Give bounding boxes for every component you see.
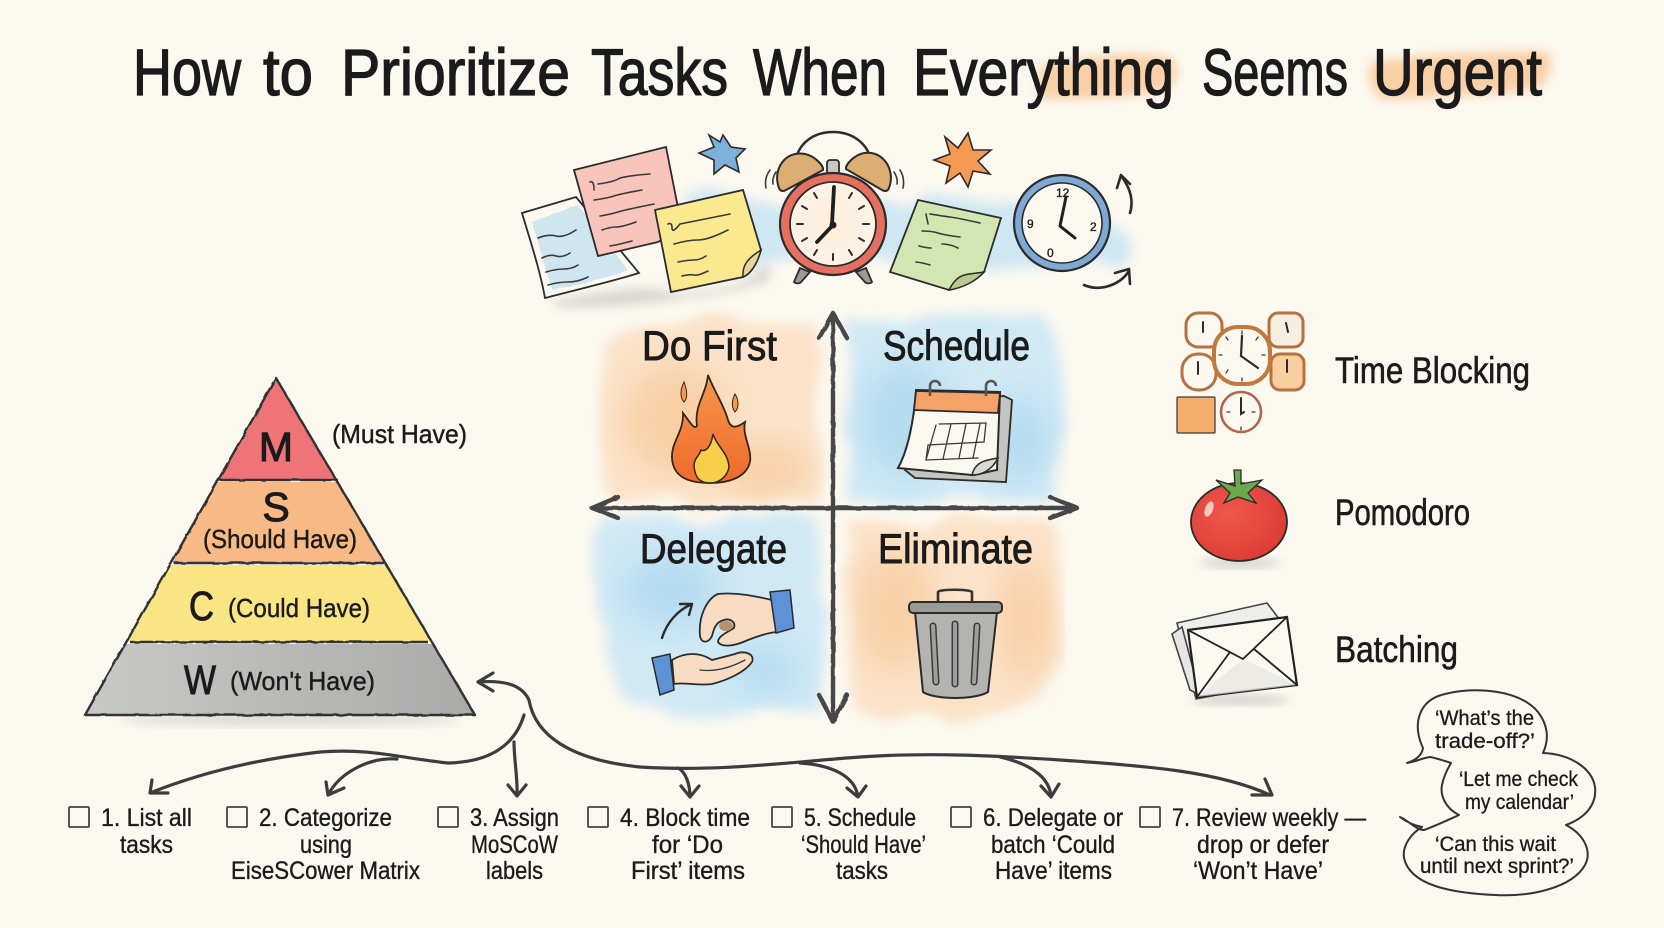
title text (133, 35, 1542, 109)
step 1: 1. List all (101, 804, 192, 832)
top illustration: overwhelm cluster (522, 132, 1132, 307)
step 1 (69, 804, 192, 859)
arrow: to step 3 (508, 742, 526, 796)
icon: blue wall clock: 0 (1047, 246, 1054, 260)
arrow: clockwise lower (1084, 269, 1130, 288)
bubble 3 text (1420, 833, 1574, 878)
bubble outlines (1400, 690, 1595, 895)
pyramid label: C: C (189, 583, 214, 629)
step 6: 6. Delegate or (983, 804, 1123, 832)
step 2: using (300, 831, 352, 859)
pyramid label: M: M (259, 424, 293, 470)
pyramid label: Won't Have: (Won't Have) (230, 666, 375, 696)
icon: blue star (699, 135, 745, 174)
icon: blue wall clock: 9 (1027, 217, 1034, 231)
speech bubbles (1400, 690, 1595, 895)
panel: techniques (1172, 313, 1530, 704)
arrow: to step 4 (678, 768, 699, 797)
quadrant heading: Eliminate: Eliminate (878, 525, 1033, 572)
step 6: Have’ items (995, 857, 1112, 885)
step 7: drop or defer (1197, 831, 1329, 859)
arrow: to step 2 (326, 759, 397, 795)
title highlight: Urgent (1369, 51, 1551, 100)
step 2 (227, 804, 420, 885)
arrow: to pyramid and steps 4 to 7 (478, 673, 1270, 795)
arrow: clockwise upper (1117, 175, 1132, 213)
note: green sticky (890, 200, 1001, 290)
bubble 3 text: ‘Can this wait (1435, 833, 1556, 856)
paper shadow (552, 262, 770, 307)
matrix axes (592, 313, 1077, 722)
title text: Prioritize (341, 35, 570, 109)
icon: tomato (1191, 470, 1287, 567)
quadrant wash: do first (598, 321, 820, 503)
blue wash behind cluster (680, 190, 1132, 265)
arrow: to step 5 (800, 763, 866, 797)
pyramid shadow (120, 715, 460, 725)
bubble 1 text (1435, 707, 1535, 753)
title text: to (263, 35, 313, 109)
note: blue paper (522, 197, 639, 298)
title text: Urgent (1373, 35, 1542, 109)
pyramid layer: W (86, 644, 474, 714)
step 3: MoSCoW (471, 831, 558, 859)
bubble 3 text: until next sprint?’ (1420, 855, 1574, 878)
flow arrows (150, 673, 1272, 797)
step 5: 5. Schedule (804, 804, 916, 832)
quadrant wash: eliminate (846, 520, 1060, 714)
pyramid label: Should Have: (Should Have) (203, 524, 357, 554)
step 3 (438, 804, 559, 885)
step 4: 4. Block time (620, 804, 750, 832)
icon: blue wall clock: 12 (1056, 186, 1070, 200)
icon: envelope stack (1172, 603, 1297, 704)
title text: Seems (1202, 35, 1348, 109)
icon: red alarm clock (766, 132, 904, 283)
step 4: First’ items (631, 857, 745, 885)
step 4 (588, 804, 750, 885)
title highlight: Everything (1038, 54, 1177, 99)
icon: blue wall clock (1014, 175, 1110, 271)
bubble 1 text: trade-off?’ (1435, 730, 1535, 753)
technique label: Time Blocking: Time Blocking (1335, 350, 1530, 391)
checklist steps (69, 804, 1366, 885)
arrow tip: to step 7 (1252, 779, 1272, 795)
pyramid label: S: S (262, 484, 290, 530)
pyramid layer: M (218, 380, 336, 480)
step 3: 3. Assign (470, 804, 559, 832)
arrow: to step 6 (1000, 757, 1059, 797)
technique label: Batching: Batching (1335, 629, 1458, 670)
bubble 2 text: my calendar’ (1465, 791, 1574, 814)
icon: orange star (934, 133, 991, 187)
pyramid label: W: W (184, 657, 216, 703)
icon: time blocking clocks (1177, 313, 1304, 433)
icon: flame (672, 375, 750, 483)
bubble 2 text (1459, 768, 1578, 814)
quadrant wash: schedule (848, 315, 1063, 502)
step 2: EiseSCower Matrix (231, 857, 420, 885)
quadrant heading: Do First: Do First (642, 322, 777, 369)
quadrant heading: Delegate: Delegate (640, 525, 787, 572)
title text: Tasks (591, 35, 728, 109)
step 7 (1140, 804, 1366, 885)
pyramid label: Must Have: (Must Have) (332, 419, 467, 449)
bubble 1 text: ‘What’s the (1435, 707, 1534, 730)
pyramid label: Could Have: (Could Have) (228, 593, 370, 623)
title (133, 35, 1551, 109)
icon: blue wall clock: 2 (1090, 220, 1097, 234)
title text: How (133, 35, 241, 109)
step 5: ‘Should Have’ (801, 831, 926, 859)
step 6: batch ‘Could (991, 831, 1115, 859)
step 5 (772, 804, 926, 885)
quadrant wash: delegate (600, 518, 820, 714)
arrow: to step 1 (150, 715, 524, 793)
technique label: Pomodoro: Pomodoro (1335, 492, 1470, 533)
step 7: ‘Won’t Have’ (1193, 857, 1323, 885)
icon: calendar (898, 381, 1012, 482)
pyramid layer: C (127, 565, 430, 641)
icon: hands passing task (652, 590, 794, 695)
panel: Eisenhower matrix (592, 313, 1077, 722)
step 4: for ‘Do (652, 831, 723, 859)
pyramid layer: S (170, 482, 385, 562)
step 3: labels (486, 857, 543, 885)
step 1: tasks (120, 831, 173, 859)
quadrant heading: Schedule: Schedule (883, 322, 1030, 369)
step 2: 2. Categorize (259, 804, 392, 832)
note: pink paper (574, 147, 682, 256)
step 5: tasks (836, 857, 888, 885)
note: yellow sticky (655, 190, 761, 292)
step 7: 7. Review weekly — (1172, 804, 1366, 832)
pyramid outline (85, 378, 475, 715)
bubble 2 text: ‘Let me check (1459, 768, 1578, 791)
icon: trash can (909, 590, 1002, 698)
title text: When (753, 35, 887, 109)
panel: MoSCoW pyramid (85, 378, 475, 725)
step 6 (951, 804, 1123, 885)
title text: Everything (913, 35, 1174, 109)
